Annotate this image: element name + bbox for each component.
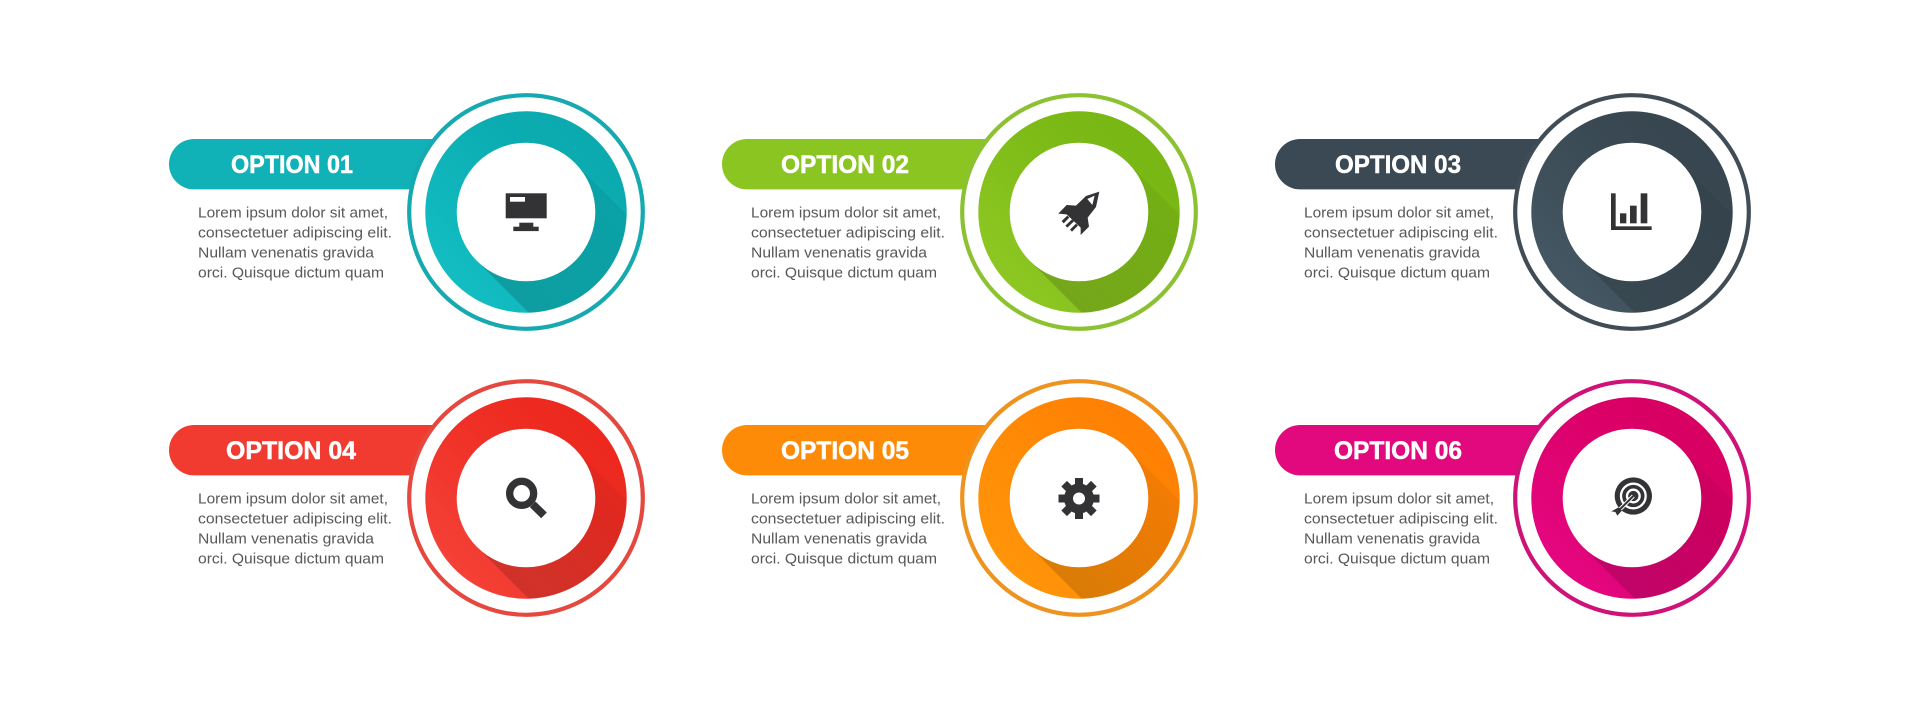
panel: option 04 (169, 381, 643, 615)
body text (751, 490, 945, 568)
heading: OPTION 01 (231, 151, 353, 179)
body text: consectetuer adipiscing elit. (198, 510, 392, 528)
circle badge (409, 95, 643, 329)
body text: orci. Quisque dictum quam (751, 264, 937, 282)
body text: consectetuer adipiscing elit. (751, 224, 945, 242)
title bar (722, 425, 1012, 475)
body text (751, 204, 945, 282)
title bar (1275, 139, 1565, 189)
body text: consectetuer adipiscing elit. (751, 510, 945, 528)
heading: OPTION 02 (781, 151, 909, 179)
body text: Lorem ipsum dolor sit amet, (751, 490, 941, 508)
body text (1304, 204, 1498, 282)
body text (1304, 490, 1498, 568)
title bar (1275, 425, 1565, 475)
body text: Nullam venenatis gravida (198, 530, 375, 548)
body text: orci. Quisque dictum quam (1304, 264, 1490, 282)
heading: OPTION 05 (781, 437, 909, 465)
body text: consectetuer adipiscing elit. (1304, 510, 1498, 528)
body text: orci. Quisque dictum quam (751, 550, 937, 568)
body text: consectetuer adipiscing elit. (198, 224, 392, 242)
body text: orci. Quisque dictum quam (198, 550, 384, 568)
heading: OPTION 03 (1335, 151, 1461, 179)
heading: OPTION 06 (1334, 437, 1462, 465)
body text: orci. Quisque dictum quam (198, 264, 384, 282)
circle badge (962, 381, 1196, 615)
icon: target with arrow (1611, 477, 1652, 516)
icon: magnifying glass (510, 481, 544, 515)
body text: Nullam venenatis gravida (198, 244, 375, 262)
panel: option 02 (722, 95, 1196, 329)
icon: bar chart (1611, 193, 1652, 230)
body text: Lorem ipsum dolor sit amet, (1304, 490, 1494, 508)
icon: gear (1058, 478, 1100, 519)
body text: Nullam venenatis gravida (751, 530, 928, 548)
title bar (169, 425, 459, 475)
body text: Lorem ipsum dolor sit amet, (198, 490, 388, 508)
body text: Nullam venenatis gravida (751, 244, 928, 262)
body text: consectetuer adipiscing elit. (1304, 224, 1498, 242)
panel: option 06 (1275, 381, 1749, 615)
circle badge (1515, 95, 1749, 329)
heading: OPTION 04 (226, 437, 356, 465)
body text: Lorem ipsum dolor sit amet, (198, 204, 388, 222)
circle badge (1515, 381, 1749, 615)
icon: computer monitor (506, 193, 547, 231)
icon: rocket (1058, 192, 1099, 235)
circle badge (962, 95, 1196, 329)
body text (198, 204, 392, 282)
body text: Lorem ipsum dolor sit amet, (1304, 204, 1494, 222)
body text: Lorem ipsum dolor sit amet, (751, 204, 941, 222)
title bar (169, 139, 459, 189)
body text: orci. Quisque dictum quam (1304, 550, 1490, 568)
body text: Nullam venenatis gravida (1304, 530, 1481, 548)
title bar (722, 139, 1012, 189)
panel: option 05 (722, 381, 1196, 615)
circle badge (409, 381, 643, 615)
body text: Nullam venenatis gravida (1304, 244, 1481, 262)
panel: option 03 (1275, 95, 1749, 329)
body text (198, 490, 392, 568)
panel: option 01 (169, 95, 643, 329)
